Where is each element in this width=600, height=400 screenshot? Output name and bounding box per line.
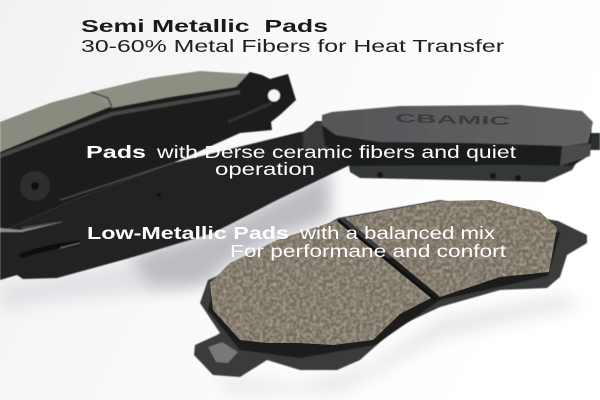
caption: ceramic pads: operation xyxy=(215,159,315,179)
caption: low-metallic pads: For performane and confort xyxy=(230,241,506,261)
upper rear pad friction surface xyxy=(0,92,112,152)
right pad top face xyxy=(322,105,593,146)
caption: ceramic pads xyxy=(86,142,516,179)
right pad lower edge xyxy=(348,160,578,182)
photo: front brake pad xyxy=(194,200,587,377)
upper rear pad backing plate xyxy=(0,72,296,232)
caption: ceramic pads: Pads xyxy=(86,142,146,162)
lower rear pad backing plate xyxy=(0,130,350,280)
front pad friction surface: right block xyxy=(345,200,557,297)
upper rear pad mounting hole xyxy=(268,90,280,102)
front pad seam xyxy=(338,220,436,300)
front pad backing plate xyxy=(194,200,587,377)
caption: ceramic pads: with Derse ceramic fibers and quiet xyxy=(156,142,516,162)
front pad friction surface: left block xyxy=(210,220,433,345)
front pad tab opening xyxy=(208,342,238,363)
friction seam xyxy=(91,92,112,107)
caption: low-metallic pads: with a balanced mix xyxy=(299,223,495,243)
caption: low-metallic pads xyxy=(87,223,506,261)
right pad side band xyxy=(322,122,592,166)
right pad bolts xyxy=(377,172,383,178)
brand mark: CBAMIC xyxy=(395,111,511,128)
heading: semi metallic pads: Semi Metallic Pads xyxy=(81,16,328,36)
photo: right pad showing backing plate with CBAMIC mark xyxy=(303,105,600,182)
photo: rear stacked brake pads xyxy=(0,71,350,280)
upper rear pad rivet xyxy=(20,171,50,201)
plate highlight edges xyxy=(22,163,173,228)
caption: low-metallic pads: Low-Metallic Pads xyxy=(87,223,289,243)
subheading: metal fibers: 30-60% Metal Fibers for Heat Transfer xyxy=(81,36,504,56)
